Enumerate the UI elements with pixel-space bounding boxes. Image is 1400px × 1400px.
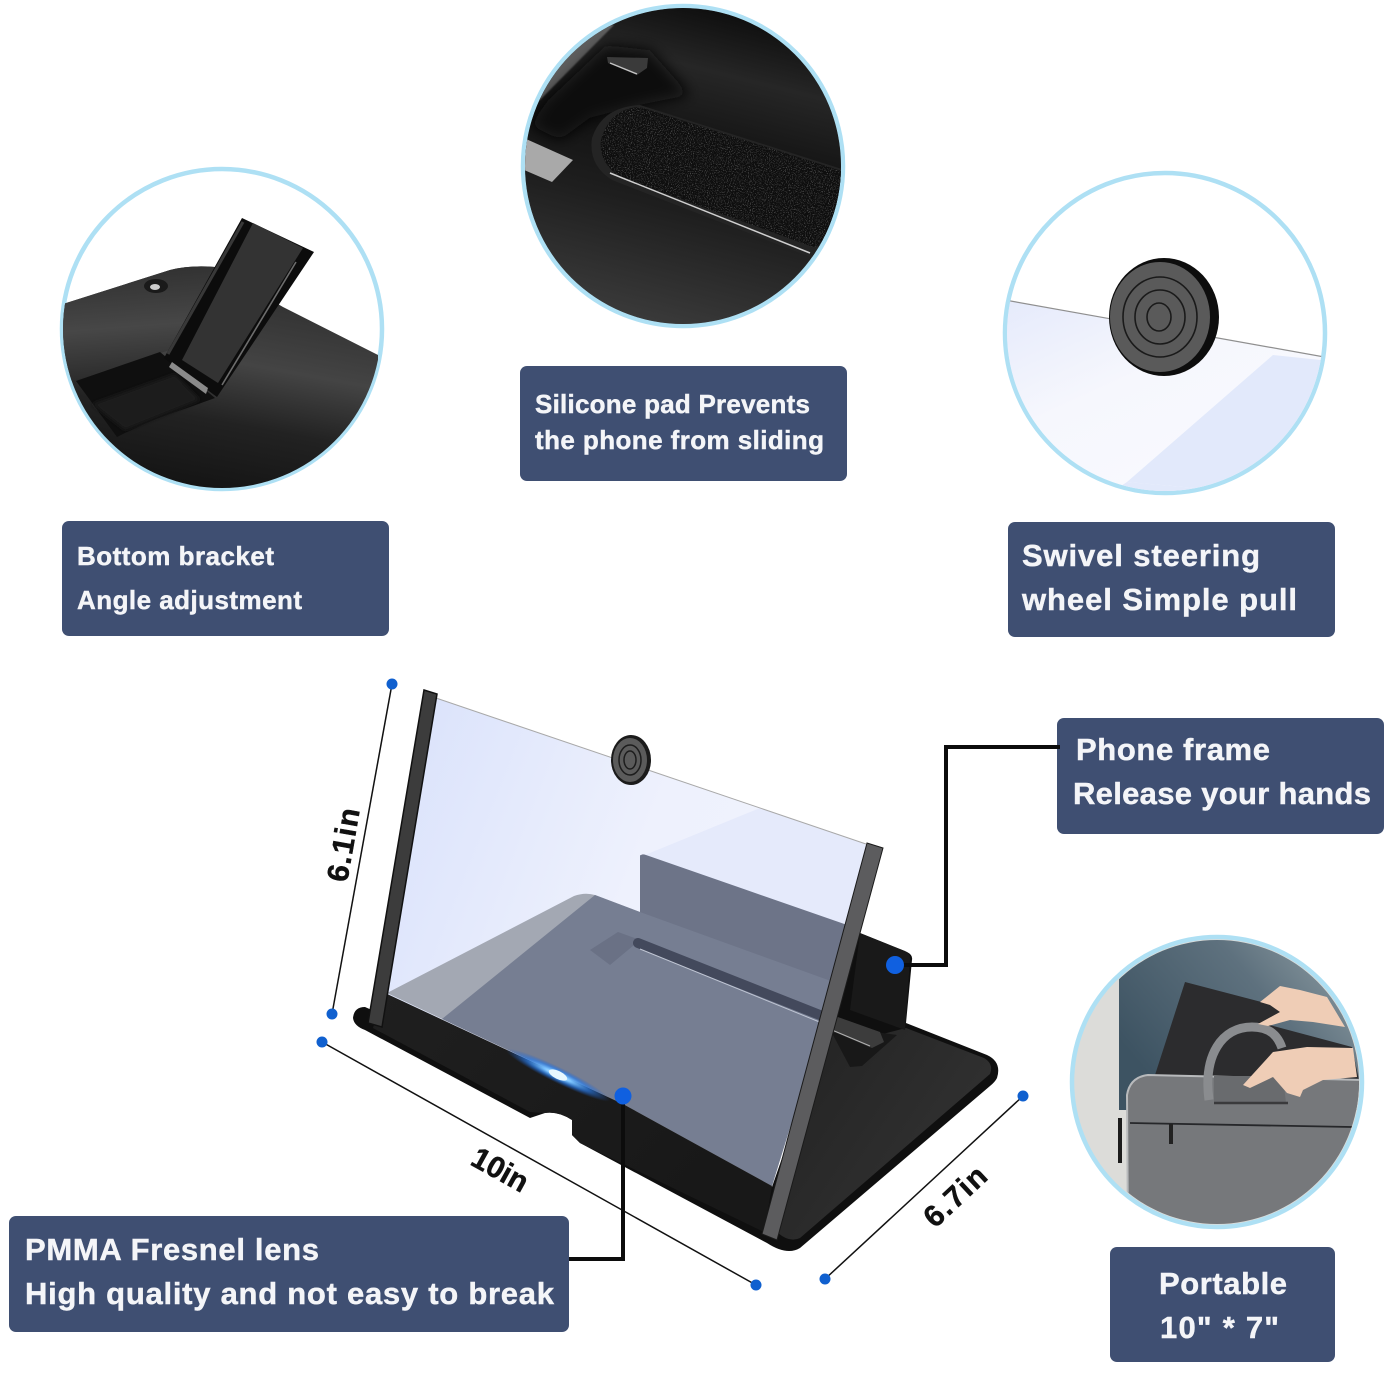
lens panel bbox=[385, 698, 866, 1186]
label: bottom bracket bbox=[62, 521, 389, 636]
circle: silicone pad close-up bbox=[520, 5, 845, 327]
dimension: 10in: 10in bbox=[466, 1141, 534, 1199]
steering wheel bbox=[1109, 258, 1219, 376]
zipper pulls bbox=[1120, 1118, 1171, 1163]
hands bbox=[1243, 986, 1357, 1097]
circle: portable bag photo bbox=[1072, 935, 1365, 1240]
lens surface bbox=[1000, 300, 1330, 500]
label: bottom bracket: Bottom bracket bbox=[77, 541, 274, 571]
pad behind lens bbox=[830, 1016, 884, 1048]
dimension: 6.1in: 6.1in bbox=[321, 806, 367, 884]
label: portable size bbox=[1110, 1247, 1335, 1362]
plate seen through lens bbox=[387, 894, 850, 1186]
label: portable size: Portable bbox=[1159, 1266, 1287, 1301]
label: swivel wheel: wheel Simple pull bbox=[1021, 582, 1297, 617]
lens right wedge bbox=[640, 808, 866, 930]
base plate bbox=[60, 266, 378, 500]
label: PMMA Fresnel lens: PMMA Fresnel lens bbox=[25, 1232, 319, 1267]
dimension: 6.7in: 6.7in bbox=[917, 1160, 994, 1234]
dimension: 10in bbox=[316, 1036, 762, 1290]
label: silicone pad: the phone from sliding bbox=[535, 425, 824, 455]
leader: fresnel lens bbox=[569, 1088, 632, 1259]
product: screen magnifier bbox=[353, 690, 998, 1251]
wheel knob bbox=[611, 735, 651, 785]
rear phone frame bbox=[850, 933, 910, 1030]
label: phone frame: Phone frame bbox=[1076, 732, 1270, 767]
light corner bbox=[539, 24, 614, 100]
leader: phone frame bbox=[886, 747, 1060, 974]
label: portable size: 10" * 7" bbox=[1160, 1310, 1279, 1345]
grey block bbox=[524, 138, 573, 182]
recess under pad bbox=[832, 1030, 897, 1067]
circle: bottom bracket close-up bbox=[60, 169, 382, 500]
left post bbox=[368, 690, 437, 1027]
screw bbox=[144, 279, 168, 293]
groove shadow bbox=[76, 352, 215, 437]
label: PMMA Fresnel lens: High quality and not easy to break bbox=[25, 1276, 555, 1311]
top surface of plate bbox=[778, 1020, 991, 1240]
angled bracket bbox=[164, 218, 314, 397]
handle slot bbox=[1214, 1076, 1286, 1103]
label: phone frame bbox=[1057, 718, 1384, 834]
lens top edge bbox=[436, 698, 866, 844]
grey bag bbox=[1126, 1074, 1359, 1224]
label: phone frame: Release your hands bbox=[1073, 776, 1371, 811]
silicone strip bbox=[638, 943, 830, 1019]
label: silicone pad bbox=[520, 366, 847, 481]
bag handle bbox=[1208, 1027, 1282, 1100]
circle: swivel wheel close-up bbox=[1000, 173, 1330, 500]
dimension: 6.7in bbox=[820, 1090, 1028, 1284]
dimension: 6.1in bbox=[321, 678, 398, 1020]
base plate bbox=[353, 933, 998, 1251]
label: silicone pad: Silicone pad Prevents bbox=[535, 389, 810, 419]
blue glow bbox=[502, 1042, 614, 1108]
label: PMMA Fresnel lens bbox=[9, 1216, 569, 1332]
wall bbox=[1119, 935, 1364, 1110]
phone stand through lens bbox=[640, 854, 853, 985]
small block bbox=[607, 57, 648, 75]
label: swivel wheel bbox=[1008, 522, 1335, 637]
label: bottom bracket: Angle adjustment bbox=[77, 585, 302, 615]
dark tablet bbox=[1155, 982, 1360, 1085]
front wall bbox=[373, 993, 772, 1232]
right post bbox=[762, 843, 883, 1240]
label: swivel wheel: Swivel steering bbox=[1022, 538, 1260, 573]
silicone pad bbox=[591, 105, 845, 262]
